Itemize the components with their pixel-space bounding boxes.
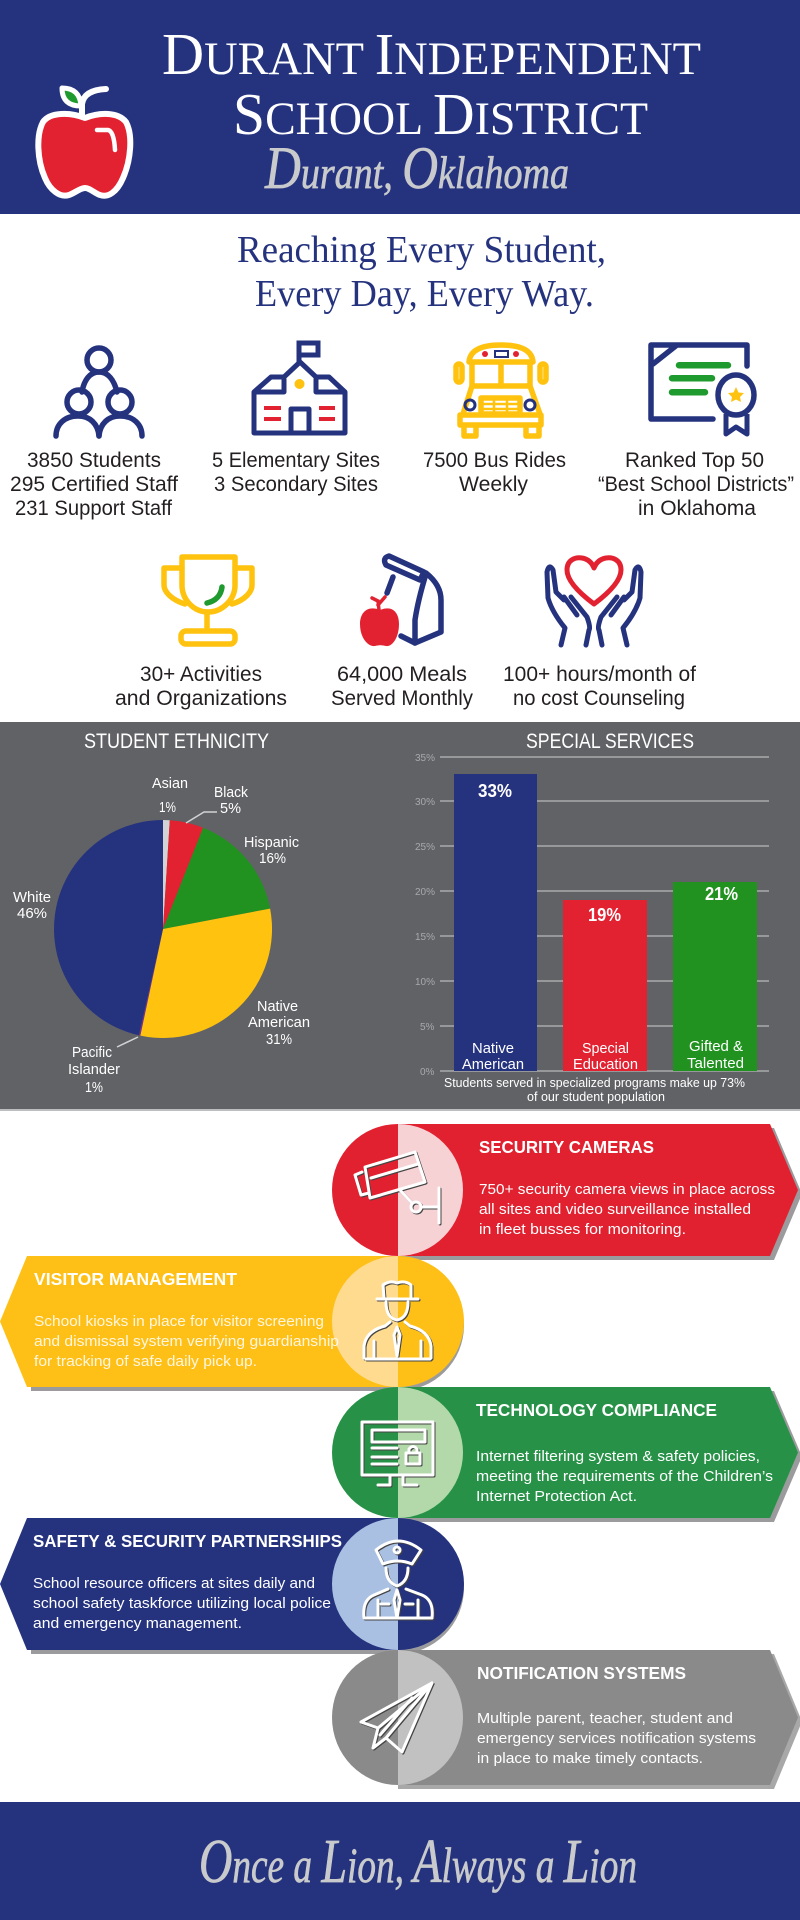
body text: in fleet busses for monitoring.: [479, 1221, 686, 1238]
pie labels: 1%: [159, 800, 176, 816]
pie labels: 46%: [17, 906, 47, 922]
body text: emergency services notification systems: [477, 1730, 756, 1747]
chart caption: [444, 1075, 745, 1104]
axis labels: 20%: [415, 887, 435, 898]
axis labels: 25%: [415, 842, 435, 853]
icon: visitor: [364, 1282, 431, 1359]
body text: for tracking of safe daily pick up.: [34, 1353, 257, 1370]
text: school sites: 5 Elementary Sites: [212, 449, 380, 472]
text: bus rides: [423, 449, 566, 496]
tagline: Reaching Every Student,: [237, 229, 606, 271]
text: bus rides: Weekly: [459, 473, 529, 496]
panel: header banner: [0, 0, 800, 214]
body text: [33, 1575, 331, 1632]
bar: special education: Special: [582, 1041, 629, 1057]
bar: special education: [563, 900, 647, 1073]
text: activities: 30+ Activities: [140, 663, 262, 686]
body text: school safety taskforce utilizing local police: [33, 1595, 331, 1612]
heading: SECURITY CAMERAS: [479, 1137, 654, 1157]
panel: notification systems: [332, 1650, 800, 1789]
text: meals: [331, 663, 473, 710]
panel: footer banner: [0, 1802, 800, 1920]
icon: lunch bag and apple: [360, 556, 441, 646]
body text: [34, 1313, 339, 1370]
panel: visitor management: [0, 1256, 464, 1391]
chart caption: Students served in specialized programs make up 73%: [444, 1075, 745, 1090]
heading: student ethnicity: STUDENT ETHNICITY: [84, 730, 269, 753]
footer slogan: Once a Lion, Always a Lion: [199, 1828, 637, 1896]
title: DURANT INDEPENDENT: [162, 21, 701, 87]
pie labels: American: [248, 1015, 310, 1031]
text: counseling: [503, 663, 696, 710]
icon: paper airplane: [361, 1683, 432, 1752]
title: [162, 21, 701, 147]
text: activities: [115, 663, 287, 710]
text: student and staff counts: 231 Support Staff: [15, 497, 172, 520]
tagline: [237, 229, 606, 315]
pie labels: [13, 776, 310, 1096]
axis labels: [415, 753, 435, 1078]
bar: gifted and talented: Gifted &: [689, 1039, 743, 1055]
body text: [477, 1710, 756, 1767]
bar: gifted and talented: [673, 882, 757, 1072]
heading: VISITOR MANAGEMENT: [34, 1269, 237, 1289]
heading: NOTIFICATION SYSTEMS: [477, 1663, 686, 1683]
bar: native american: Native: [472, 1041, 514, 1057]
pie labels: White: [13, 890, 51, 906]
body text: [479, 1181, 775, 1238]
pie labels: Islander: [68, 1062, 120, 1078]
bar: native american: 33%: [478, 781, 512, 801]
pie chart: ethnicity: [13, 776, 310, 1096]
axis labels: 5%: [420, 1022, 435, 1033]
pie labels: 1%: [85, 1080, 103, 1096]
pie labels: 5%: [220, 801, 241, 817]
pie labels: Asian: [152, 776, 188, 792]
pie labels: 16%: [259, 851, 286, 867]
text: student and staff counts: 295 Certified Staff: [10, 473, 178, 496]
chart caption: of our student population: [527, 1089, 665, 1104]
icon: trophy: [164, 557, 252, 644]
text: counseling: 100+ hours/month of: [503, 663, 696, 686]
bar: gifted and talented: Talented: [687, 1056, 744, 1072]
bar: native american: American: [462, 1057, 524, 1073]
icon: school building: [254, 343, 345, 433]
body text: Multiple parent, teacher, student and: [477, 1710, 733, 1727]
body text: Internet filtering system & safety policies,: [476, 1448, 760, 1465]
body text: and emergency management.: [33, 1615, 242, 1632]
panel: security cameras: [332, 1124, 800, 1260]
body text: School kiosks in place for visitor screening: [34, 1313, 324, 1330]
text: student and staff counts: 3850 Students: [27, 449, 161, 472]
text: school sites: 3 Secondary Sites: [214, 473, 378, 496]
icon: school bus: [456, 345, 546, 436]
body text: Internet Protection Act.: [476, 1488, 637, 1505]
axis labels: 35%: [415, 753, 435, 764]
pie labels: Hispanic: [244, 835, 299, 851]
text: school sites: [212, 449, 380, 496]
icon: police officer: [364, 1541, 432, 1618]
body text: meeting the requirements of the Children’s: [476, 1468, 773, 1485]
bar: special education: Education: [573, 1057, 638, 1073]
axis labels: 10%: [415, 977, 435, 988]
axis labels: 15%: [415, 932, 435, 943]
text: student and staff counts: [10, 449, 178, 520]
title: SCHOOL DISTRICT: [233, 81, 648, 147]
text: ranking: in Oklahoma: [638, 497, 756, 520]
text: bus rides: 7500 Bus Rides: [423, 449, 566, 472]
pie labels: Black: [214, 785, 249, 801]
icon: hands holding heart: [547, 558, 641, 645]
icon: certificate: [651, 345, 754, 434]
tagline: Every Day, Every Way.: [255, 273, 594, 315]
text: ranking: Ranked Top 50: [625, 449, 764, 472]
icon: apple logo: [38, 88, 130, 196]
heading: TECHNOLOGY COMPLIANCE: [476, 1400, 717, 1420]
body text: and dismissal system verifying guardianship: [34, 1333, 339, 1350]
text: meals: Served Monthly: [331, 687, 473, 710]
icon: students: [56, 348, 142, 436]
text: ranking: [598, 449, 794, 520]
panel: charts: [0, 722, 800, 1111]
axis labels: 0%: [420, 1067, 435, 1078]
body text: [476, 1448, 773, 1505]
text: meals: 64,000 Meals: [337, 663, 467, 686]
body text: all sites and video surveillance installed: [479, 1201, 751, 1218]
panel: safety and security partnerships: [0, 1518, 464, 1654]
bar chart: special services: [415, 753, 769, 1104]
axis labels: 30%: [415, 797, 435, 808]
text: counseling: no cost Counseling: [513, 687, 685, 710]
body text: School resource officers at sites daily and: [33, 1575, 315, 1592]
heading: SAFETY & SECURITY PARTNERSHIPS: [33, 1531, 342, 1551]
icon: security camera: [355, 1152, 439, 1223]
body text: 750+ security camera views in place across: [479, 1181, 775, 1198]
text: ranking: “Best School Districts”: [598, 473, 794, 496]
bar: native american: [454, 774, 537, 1073]
location subtitle: Durant, Oklahoma: [264, 135, 569, 201]
text: activities: and Organizations: [115, 687, 287, 710]
body text: in place to make timely contacts.: [477, 1750, 703, 1767]
pie labels: Native: [257, 999, 298, 1015]
pie labels: 31%: [266, 1032, 292, 1048]
bar: gifted and talented: 21%: [705, 884, 738, 904]
bar: special education: 19%: [588, 905, 621, 925]
pie labels: Pacific: [72, 1045, 112, 1061]
panel: technology compliance: [332, 1387, 800, 1522]
heading: special services: SPECIAL SERVICES: [526, 730, 694, 753]
icon: secure monitor: [362, 1422, 433, 1485]
